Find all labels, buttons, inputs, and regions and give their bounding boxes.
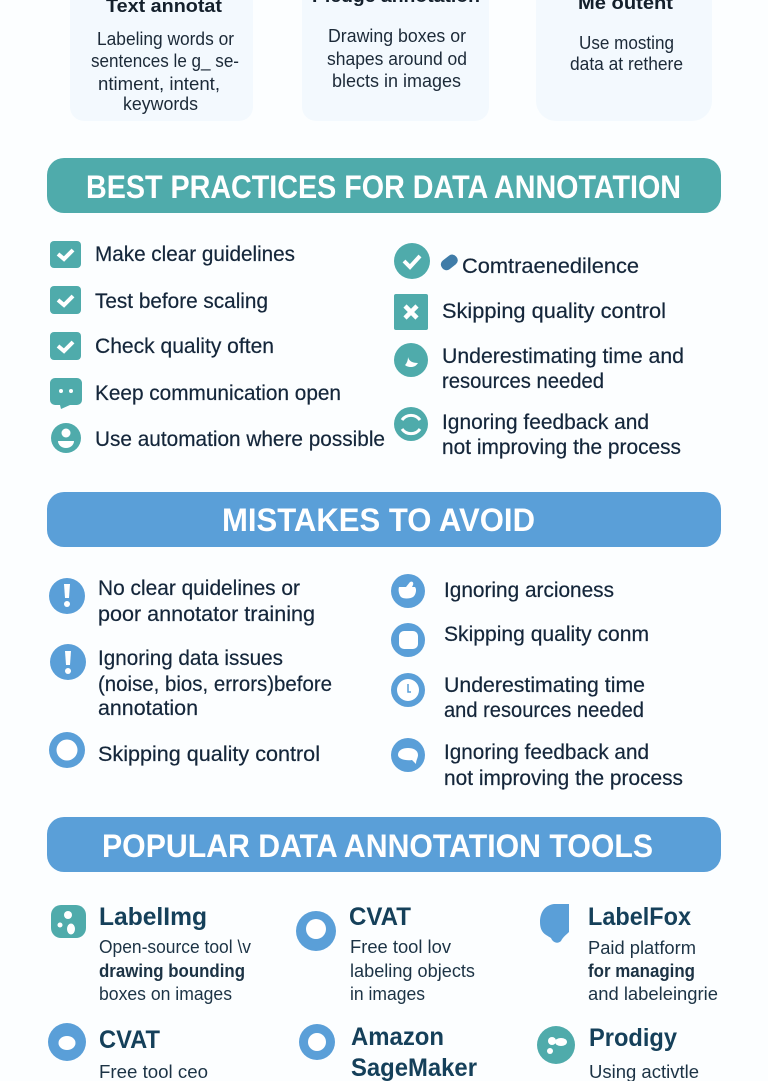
item: make clear guidelines: Make clear guidelines: [95, 243, 295, 266]
item: skipping quality control: Skipping quality control: [98, 743, 320, 766]
item: make clear guidelines: [50, 241, 295, 268]
heading: mistakes to avoid: [47, 492, 721, 547]
panel: text annotation card: [70, 0, 253, 121]
item: keep communication open: [50, 378, 341, 409]
item: confidence garbled: Comtraenedilence: [462, 255, 639, 278]
tool: LabelImg: Open-source tool \v: [99, 936, 252, 957]
item: ignoring feedback: [394, 407, 681, 459]
tool: LabelImg: boxes on images: [99, 983, 232, 1004]
tool: CVAT top: [296, 903, 475, 1004]
item: ignoring feedback: not improving the process: [442, 436, 681, 459]
item: test before scaling: Test before scaling: [95, 290, 268, 313]
item: test before scaling: [50, 286, 268, 314]
item: skipping quality control: [49, 732, 320, 768]
item: skipping quality garbled: [391, 623, 649, 657]
panel: image annotation card: shapes around od: [327, 48, 467, 69]
heading: mistakes to avoid: MISTAKES TO AVOID: [222, 502, 535, 538]
tool: LabelImg: LabelImg: [99, 903, 207, 931]
tool: Prodigy: Prodigy: [589, 1024, 677, 1052]
panel: image annotation card: blects in images: [332, 70, 461, 91]
tool: Amazon SageMaker: [299, 1023, 477, 1081]
tool: CVAT bottom: CVAT: [99, 1026, 160, 1054]
tool: LabelFox: LabelFox: [588, 903, 691, 931]
panel: best practices right list: [394, 243, 684, 459]
panel: third annotation card: [536, 0, 712, 121]
heading: popular tools: POPULAR DATA ANNOTATION TOOLS: [102, 828, 653, 864]
item: use automation: Use automation where possible: [95, 428, 385, 451]
item: ignoring data issues: (noise, bios, errors)before: [98, 673, 332, 696]
panel: text annotation card: ntiment, intent,: [98, 73, 220, 94]
item: skipping quality garbled: Skipping quality conm: [444, 623, 649, 646]
panel: text annotation card: keywords: [123, 93, 198, 114]
item: ignoring data issues: [50, 644, 332, 720]
item: underestimating time: Underestimating time and: [442, 345, 684, 368]
tool: CVAT top: in images: [350, 983, 425, 1004]
item: no clear guidelines: [49, 577, 315, 626]
item: ignoring data issues: annotation: [98, 697, 198, 720]
panel: image annotation card: [302, 0, 489, 121]
panel: third annotation card: Use mosting: [579, 32, 674, 53]
item: skipping quality control: [394, 294, 666, 330]
heading: popular tools: [47, 817, 721, 872]
item: ignoring feedback: not improving the process: [444, 767, 683, 790]
item: ignoring arcioness: [391, 574, 614, 608]
item: underestimating time: [394, 343, 684, 393]
tool: CVAT bottom: [48, 1023, 208, 1081]
item: check quality often: [50, 332, 274, 360]
item: ignoring arcioness: Ignoring arcioness: [444, 579, 614, 602]
panel: image annotation card: Drawing boxes or: [328, 25, 466, 46]
item: no clear guidelines: poor annotator training: [98, 603, 315, 626]
item: ignoring feedback: Ignoring feedback and: [444, 741, 649, 764]
panel: mistakes right list: [391, 574, 683, 790]
item: confidence garbled: [394, 243, 639, 279]
item: underestimating time: [391, 673, 645, 722]
item: underestimating time: resources needed: [442, 370, 604, 393]
item: ignoring feedback: [391, 738, 683, 790]
tool: LabelFox: for managing: [588, 960, 695, 981]
item: use automation: [51, 423, 385, 453]
panel: best practices left list: [50, 241, 385, 453]
tool: CVAT top: labeling objects: [350, 960, 475, 981]
item: no clear guidelines: No clear quidelines or: [98, 577, 300, 600]
tool: CVAT top: Free tool lov: [350, 936, 452, 957]
tool: LabelImg: drawing bounding: [99, 960, 245, 981]
item: underestimating time: Underestimating time: [444, 674, 645, 697]
heading: best practices: [47, 158, 721, 213]
tool: Amazon SageMaker: Amazon: [351, 1023, 444, 1051]
item: ignoring data issues: Ignoring data issues: [98, 647, 283, 670]
tool: LabelImg: [51, 903, 252, 1004]
tool: LabelFox: Paid platform: [588, 937, 696, 958]
panel: text annotation card: sentences le g_ se-: [91, 50, 239, 72]
item: check quality often: Check quality often: [95, 335, 274, 358]
panel: third annotation card: data at rethere: [570, 53, 683, 74]
item: keep communication open: Keep communication open: [95, 382, 341, 405]
panel: text annotation card: Labeling words or: [97, 28, 234, 49]
item: underestimating time: and resources needed: [444, 699, 644, 722]
heading: best practices: BEST PRACTICES FOR DATA ANNOTATION: [86, 169, 681, 205]
tool: LabelFox: [540, 903, 718, 1004]
tool: LabelFox: and labeleingrie: [588, 983, 718, 1004]
item: ignoring feedback: Ignoring feedback and: [442, 411, 649, 434]
tool: CVAT top: CVAT: [349, 903, 411, 931]
panel: mistakes left list: [49, 577, 332, 768]
item: skipping quality control: Skipping quality control: [442, 300, 666, 323]
tool: Prodigy: [537, 1024, 699, 1081]
